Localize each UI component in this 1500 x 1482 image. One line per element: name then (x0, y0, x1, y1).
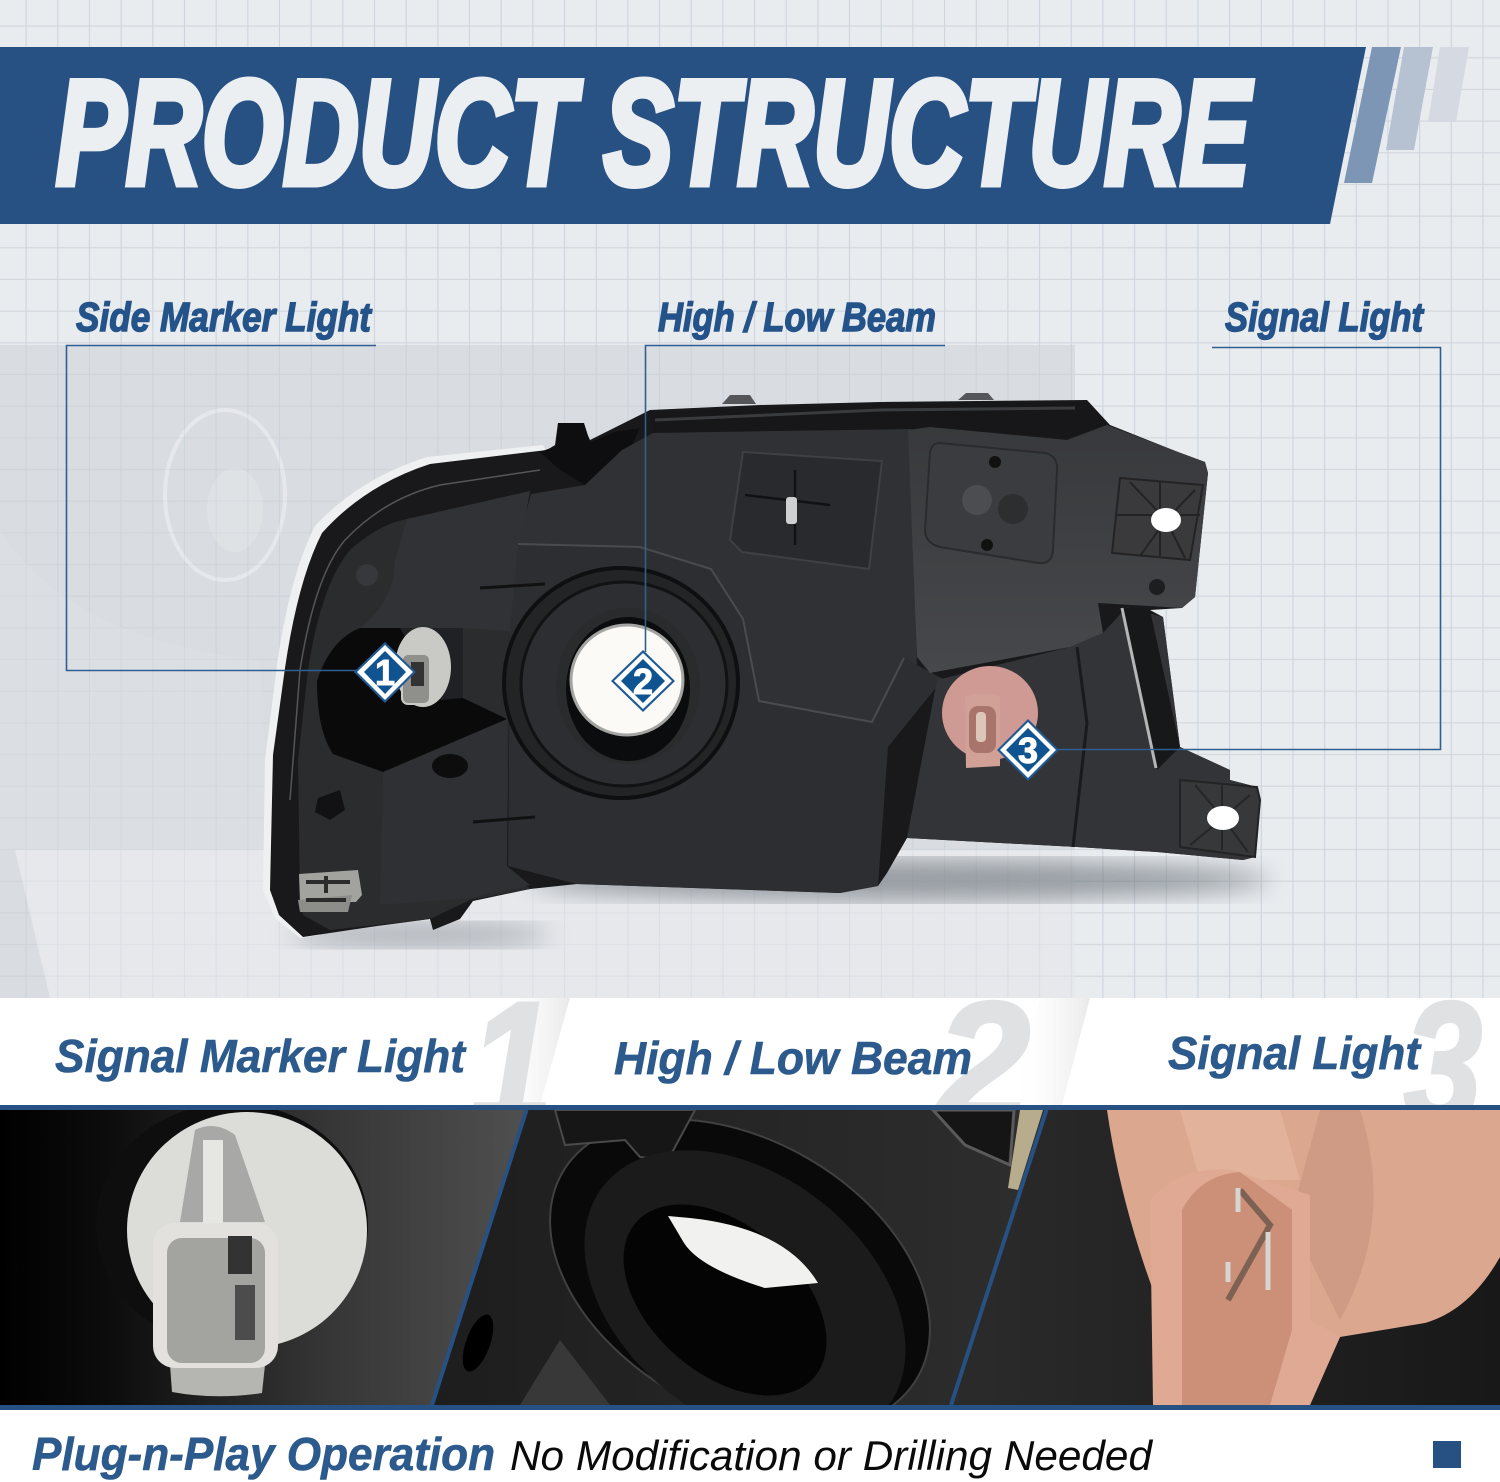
heading: signal light: Signal Light (1225, 294, 1425, 340)
heading: high low beam: High / Low Beam (658, 294, 936, 340)
bolt (1008, 1110, 1043, 1190)
central upper panel (518, 429, 917, 722)
photo strip frame (0, 1105, 1500, 1410)
badge 3: 3 (1018, 730, 1038, 771)
upper right box (908, 425, 1208, 673)
badge 1 (354, 642, 416, 703)
mount clip top (540, 423, 640, 485)
callout line: side marker light (66, 346, 376, 670)
lens edge (263, 445, 550, 938)
lens highlight (668, 1216, 818, 1288)
rim highlight (290, 470, 540, 800)
small ribs (473, 584, 545, 822)
top band (650, 402, 1108, 438)
beam gasket (504, 568, 738, 798)
side slot (1122, 607, 1180, 770)
footer square (1433, 1441, 1461, 1468)
dimple (356, 564, 378, 586)
housing silhouette (270, 400, 1260, 937)
top clips (722, 393, 994, 404)
photo dividers (432, 1110, 1046, 1405)
ghost number 2: 2 (933, 967, 1030, 1162)
ghost number 1: 1 (470, 967, 552, 1162)
shadow (290, 860, 1270, 947)
background: faded car photo (0, 0, 1500, 1000)
left lower block (380, 719, 530, 905)
wire clip lower left (298, 870, 362, 912)
gasket ring (584, 1150, 906, 1405)
label: signal light: Signal Light (1168, 1027, 1422, 1079)
detail photo 2: beam gasket (434, 1110, 1044, 1405)
callout line: high low beam (646, 346, 945, 652)
lens opening (624, 1204, 826, 1396)
recess (933, 1110, 1014, 1165)
feature label band (0, 998, 1500, 1105)
detail photo 3: signal socket (950, 1110, 1500, 1405)
mount bracket upper (1112, 478, 1203, 560)
top clip (555, 1110, 695, 1160)
side hole (432, 754, 468, 778)
left frame (298, 491, 530, 930)
title banner (0, 47, 1469, 224)
label: signal marker light: Signal Marker Light (55, 1030, 467, 1082)
ghost number 3: 3 (1404, 967, 1482, 1162)
background: blueprint grid (0, 0, 1500, 1000)
mount bracket lower (1180, 780, 1260, 857)
molded symbol (315, 790, 345, 820)
headlight product photo (263, 393, 1270, 947)
callout line: signal light (1055, 348, 1440, 750)
footer bold claim: Plug-n-Play Operation (32, 1428, 495, 1480)
label: high low beam: High / Low Beam (614, 1032, 972, 1084)
badge 2: 2 (633, 661, 653, 702)
badge 1: 1 (375, 652, 395, 693)
left upper block (360, 491, 530, 631)
signal socket (942, 666, 1038, 768)
back lower section (907, 607, 1260, 860)
footer band (0, 1410, 1500, 1482)
badge 2 (611, 650, 675, 712)
footer description: No Modification or Drilling Needed (510, 1432, 1154, 1479)
heading: side marker light: Side Marker Light (76, 294, 373, 340)
detail photo 1: marker socket (0, 1103, 530, 1405)
stud recess (730, 452, 882, 569)
square recess (925, 443, 1057, 563)
central lower panel (508, 544, 943, 893)
badge 3 (997, 719, 1059, 781)
leaf mark (1149, 579, 1165, 595)
large cavity (549, 1119, 931, 1405)
banner accent stripes (1344, 47, 1469, 183)
socket 1 recess (317, 627, 507, 772)
